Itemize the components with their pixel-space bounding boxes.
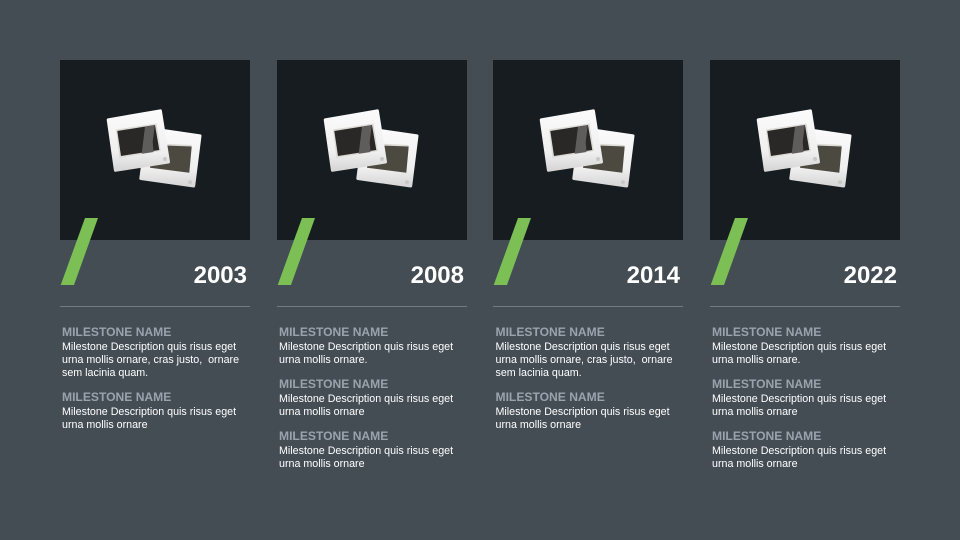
milestone 3: Milestone Description quis risus eget urna mollis ornare: [279, 445, 453, 470]
green slash: [494, 218, 531, 285]
green slash: [710, 218, 748, 285]
milestone 3: MILESTONE NAME: [279, 429, 388, 443]
icon: photo slides: [540, 109, 634, 188]
milestone 1: MILESTONE NAME: [279, 325, 388, 339]
milestone 2: Milestone Description quis risus eget urna mollis ornare: [712, 393, 886, 418]
milestone 2: MILESTONE NAME: [496, 390, 605, 404]
milestone 1: Milestone Description quis risus eget urna mollis ornare, cras justo, ornare sem lacinia quam.: [496, 341, 673, 379]
year: 2003: [194, 262, 247, 289]
icon: photo slides: [756, 109, 852, 188]
milestone 2: Milestone Description quis risus eget urna mollis ornare: [62, 406, 236, 431]
year: 2022: [844, 262, 897, 289]
year: 2014: [627, 262, 680, 289]
milestone 1: [279, 325, 453, 366]
milestone 2: MILESTONE NAME: [62, 390, 171, 404]
milestone 3: MILESTONE NAME: [712, 429, 821, 443]
milestone 2: [62, 390, 236, 431]
milestone 3: [712, 429, 886, 470]
milestone 3: [279, 429, 453, 470]
green slash: [278, 218, 315, 285]
image panel: [710, 60, 900, 240]
milestone 2: MILESTONE NAME: [279, 377, 388, 391]
milestone 2: [712, 377, 886, 418]
green slash: [60, 218, 98, 285]
year: 2008: [411, 262, 464, 289]
column: 2022: [710, 60, 900, 470]
image panel: [60, 60, 250, 240]
milestone 3: Milestone Description quis risus eget urna mollis ornare: [712, 445, 886, 470]
milestone 2: [496, 390, 670, 431]
milestone 1: MILESTONE NAME: [62, 325, 171, 339]
image panel: [277, 60, 467, 240]
milestone 1: Milestone Description quis risus eget urna mollis ornare.: [279, 341, 453, 366]
milestone 1: MILESTONE NAME: [712, 325, 821, 339]
milestone 2: [279, 377, 453, 418]
column: 2014: [493, 60, 683, 431]
milestone 2: Milestone Description quis risus eget urna mollis ornare: [496, 406, 670, 431]
milestone 1: Milestone Description quis risus eget urna mollis ornare, cras justo, ornare sem lacinia quam.: [62, 341, 239, 379]
milestone 1: Milestone Description quis risus eget urna mollis ornare.: [712, 341, 886, 366]
milestone 2: MILESTONE NAME: [712, 377, 821, 391]
milestone 1: MILESTONE NAME: [496, 325, 605, 339]
icon: photo slides: [324, 109, 418, 188]
milestone 2: Milestone Description quis risus eget urna mollis ornare: [279, 393, 453, 418]
milestone 1: [712, 325, 886, 366]
column: 2008: [277, 60, 467, 470]
icon: photo slides: [106, 109, 202, 188]
column: 2003: [60, 60, 250, 431]
image panel: [493, 60, 683, 240]
